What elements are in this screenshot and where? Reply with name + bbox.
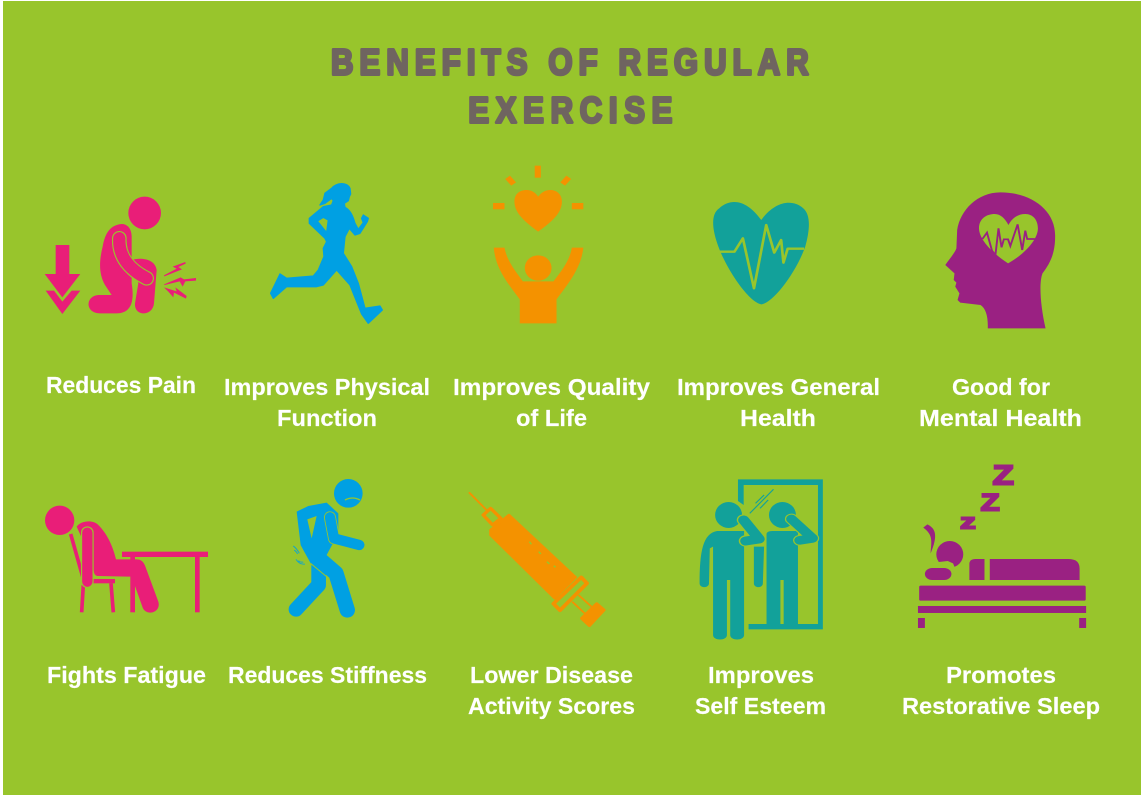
title (331, 42, 809, 131)
icon: sleeping person in bed (918, 459, 1086, 628)
icon: heart with pulse (713, 202, 809, 304)
label: improves quality of life: of Life (516, 405, 587, 431)
label: improves physical function: Function (277, 405, 377, 431)
label: improves general health: Health (740, 405, 816, 431)
icon: runner (271, 184, 382, 323)
title: EXERCISE (468, 90, 672, 131)
label: promotes restorative sleep: Promotes (946, 662, 1056, 688)
icon: tired person at desk (45, 506, 208, 613)
label: improves physical function (224, 374, 430, 431)
label: improves quality of life (453, 374, 650, 431)
label: improves self esteem: Self Esteem (695, 693, 826, 719)
icon: sleeping person in bed: Z (981, 489, 1000, 516)
label: promotes restorative sleep (902, 662, 1100, 719)
icon: heart and raised arms (493, 166, 583, 323)
label: lower disease activity scores: Activity Scores (468, 693, 635, 719)
label: improves physical function: Improves Physical (224, 374, 430, 400)
icon: head with heart (945, 192, 1055, 328)
icon: people at mirror (700, 479, 823, 639)
icon: syringe (469, 492, 604, 626)
label: improves general health: Improves General (677, 374, 880, 400)
label: improves self esteem (695, 662, 826, 719)
label: good for mental health (919, 374, 1082, 431)
label: reduces pain: Reduces Pain (46, 372, 196, 398)
label: improves quality of life: Improves Quality (453, 374, 650, 400)
label: promotes restorative sleep: Restorative Sleep (902, 693, 1100, 719)
label: lower disease activity scores: Lower Disease (470, 662, 633, 688)
label: improves general health (677, 374, 880, 431)
icon: sleeping person in bed: z (960, 510, 976, 533)
label: fights fatigue: Fights Fatigue (47, 662, 206, 688)
icon: reduces pain (45, 197, 196, 314)
label: good for mental health: Mental Health (919, 405, 1082, 431)
icon: stiff walking person (293, 479, 363, 610)
title: BENEFITS OF REGULAR (331, 42, 809, 83)
icon: sleeping person in bed: Z (993, 459, 1014, 491)
label: lower disease activity scores (468, 662, 635, 719)
label: good for mental health: Good for (952, 374, 1050, 400)
label: reduces stiffness: Reduces Stiffness (228, 662, 427, 688)
label: improves self esteem: Improves (708, 662, 814, 688)
